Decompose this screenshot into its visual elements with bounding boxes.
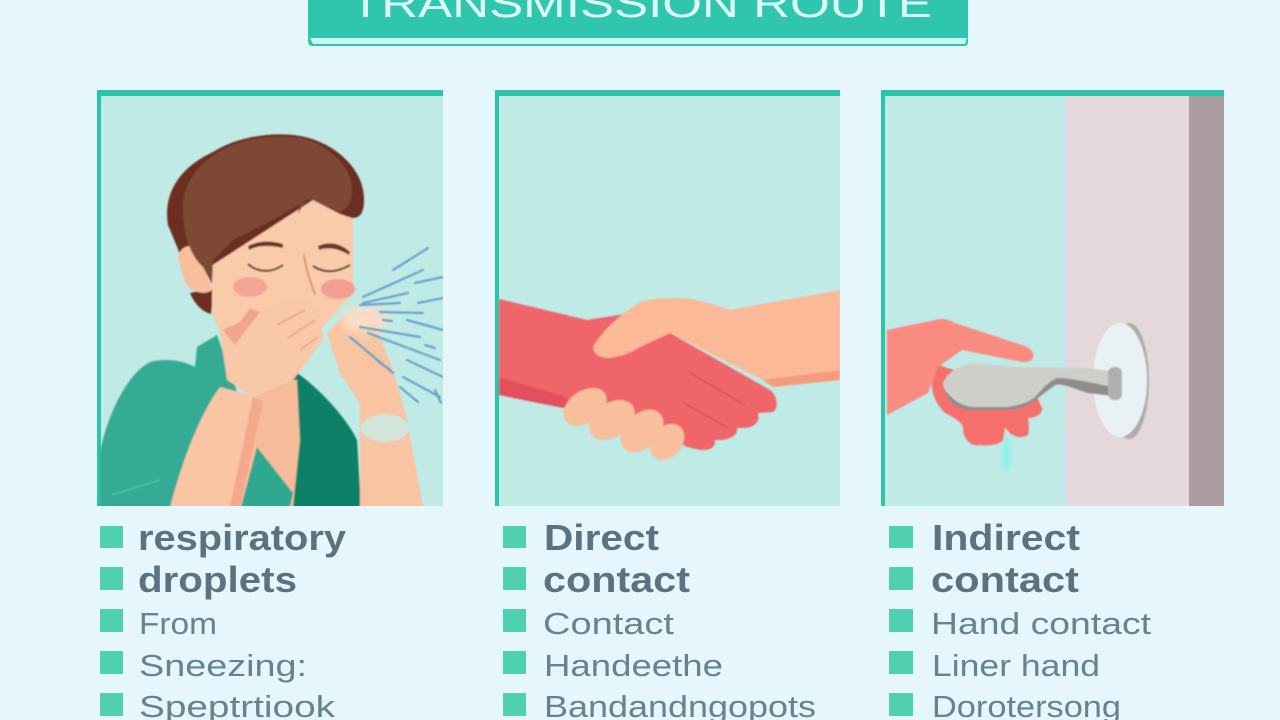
list: direct contact: Direct <box>544 517 659 558</box>
list: respiratory droplets <box>100 517 346 720</box>
list: indirect contact: Indirect <box>932 517 1080 558</box>
icon: handshake <box>499 290 840 467</box>
icon: sneezing person <box>100 134 423 507</box>
list: indirect contact: Hand contact <box>931 606 1151 641</box>
list: direct contact: Contact <box>543 606 674 641</box>
list: indirect contact: Liner hand <box>932 648 1100 683</box>
icon: hand on door handle <box>887 319 1149 445</box>
list: direct contact: Handeethe <box>544 648 723 683</box>
panel: indirect contact illustration <box>881 90 1224 506</box>
icon: water drip <box>1002 435 1011 472</box>
panel: respiratory droplets illustration <box>97 90 443 507</box>
icon: droplet spray <box>341 248 443 403</box>
list: indirect contact <box>889 517 1151 720</box>
panel: direct contact illustration <box>495 90 840 506</box>
list: respiratory droplets: respiratory <box>138 517 346 558</box>
list: direct contact <box>503 517 816 720</box>
list: direct contact: contact <box>543 559 690 600</box>
list: respiratory droplets: From <box>139 606 217 641</box>
title banner <box>308 0 968 46</box>
list: respiratory droplets: Sneezing: <box>139 648 307 683</box>
list: respiratory droplets: droplets <box>138 559 297 600</box>
list: indirect contact: contact <box>931 559 1079 600</box>
